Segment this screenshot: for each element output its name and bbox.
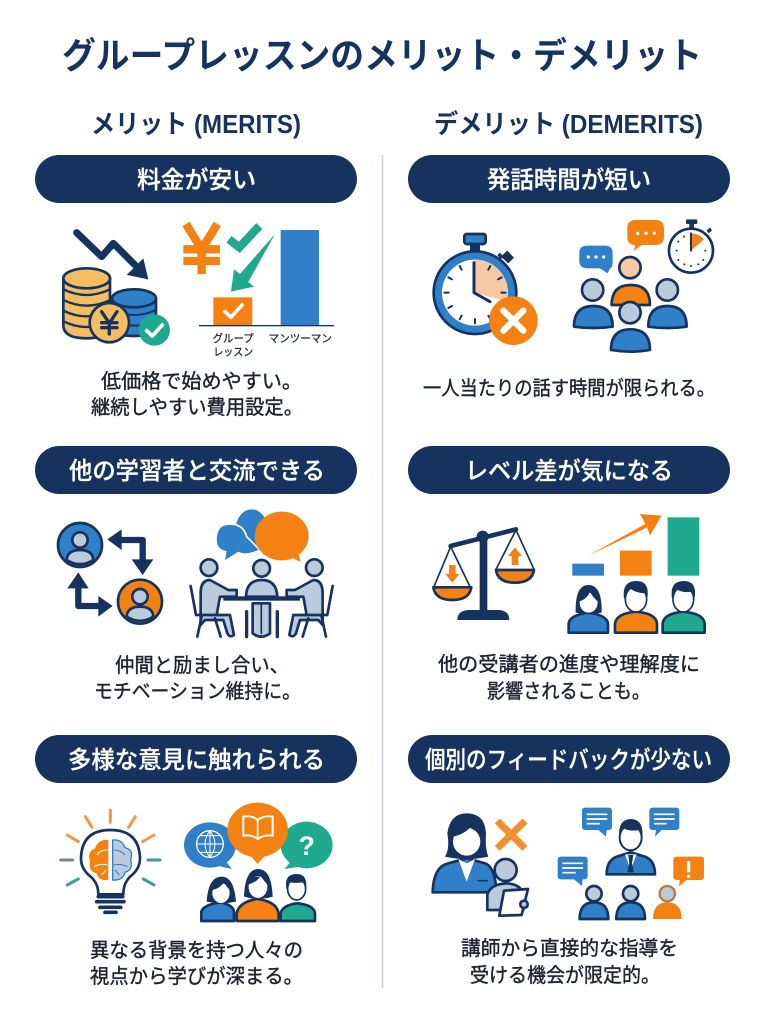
text: low cost description: 継続しやすい費用設定。 (91, 396, 303, 419)
icon: teacher and student with cross (433, 813, 528, 916)
icon: stopwatch with cross (434, 234, 538, 345)
pill heading: peer interaction: 他の学習者と交流できる (69, 458, 325, 485)
text: feedback description: 講師から直接的な指導を (461, 937, 678, 960)
icon: balance scale (433, 529, 534, 620)
pill heading: low cost: 料金が安い (137, 167, 256, 194)
icon: falling price coins (63, 233, 170, 346)
text: level gap description: 他の受講者の進度や理解度に (438, 653, 700, 676)
panel: diverse opinions (35, 735, 357, 988)
chart: group vs one-to-one cost: マンツーマン (269, 333, 332, 345)
chart: group vs one-to-one cost: グループ (213, 331, 254, 345)
panel: peer interaction (35, 446, 357, 703)
pill heading: diverse opinions: 多様な意見に触れられる (68, 747, 325, 774)
pill heading: peer interaction (35, 446, 357, 494)
text: low cost description (91, 370, 303, 419)
pill heading: level gap: レベル差が気になる (465, 458, 673, 485)
chart: group vs one-to-one cost: レッスン (213, 347, 253, 359)
text: level gap description: 影響されることも。 (487, 680, 650, 703)
panel: short speaking time (408, 155, 730, 400)
pill heading: diverse opinions (35, 735, 357, 783)
text: level gap description (438, 653, 700, 703)
text: peer interaction description: 仲間と励まし合い、 (115, 654, 289, 677)
icon: team meeting at table (191, 509, 333, 637)
icon: discussion bubbles and people: ? (298, 831, 315, 861)
text: diverse opinions description: 異なる背景を持つ人々の (90, 939, 303, 962)
chart: group vs one-to-one cost (183, 224, 334, 359)
text: short speaking time description: 一人当たりの話す時間が限られる。 (423, 377, 715, 400)
pill heading: low cost (35, 155, 357, 203)
text: low cost description: 低価格で始めやすい。 (101, 370, 302, 393)
title: グループレッスンのメリット・デメリット (62, 35, 702, 76)
panel: level gap (408, 446, 730, 703)
text: peer interaction description: モチベーション維持に。 (94, 680, 301, 703)
icon: instructor and students with feedback bubbles (558, 808, 704, 919)
text: feedback description: 受ける機会が限定的。 (470, 964, 660, 987)
pill heading: short speaking time: 発話時間が短い (487, 167, 651, 194)
icon: exchange between learners (58, 523, 162, 624)
text: peer interaction description (94, 654, 301, 703)
icon: learners at different levels (569, 514, 705, 633)
icon: group waiting to speak (574, 219, 713, 352)
pill heading: short speaking time (408, 155, 730, 203)
icon: discussion bubbles and people (184, 803, 333, 921)
text: feedback description (461, 937, 678, 987)
text: diverse opinions description: 視点から学びが深まる。 (90, 965, 303, 988)
heading: demerits column: デメリット (DEMERITS) (434, 109, 703, 139)
panel: little individual feedback (408, 735, 730, 987)
pill heading: little individual feedback (408, 735, 730, 783)
text: diverse opinions description (90, 939, 303, 988)
panel: low cost (35, 155, 357, 419)
pill heading: little individual feedback: 個別のフィードバックが少ない (425, 747, 712, 774)
icon: light bulb with brain (61, 810, 160, 912)
pill heading: level gap (408, 446, 730, 494)
heading: merits column: メリット (MERITS) (91, 109, 301, 139)
